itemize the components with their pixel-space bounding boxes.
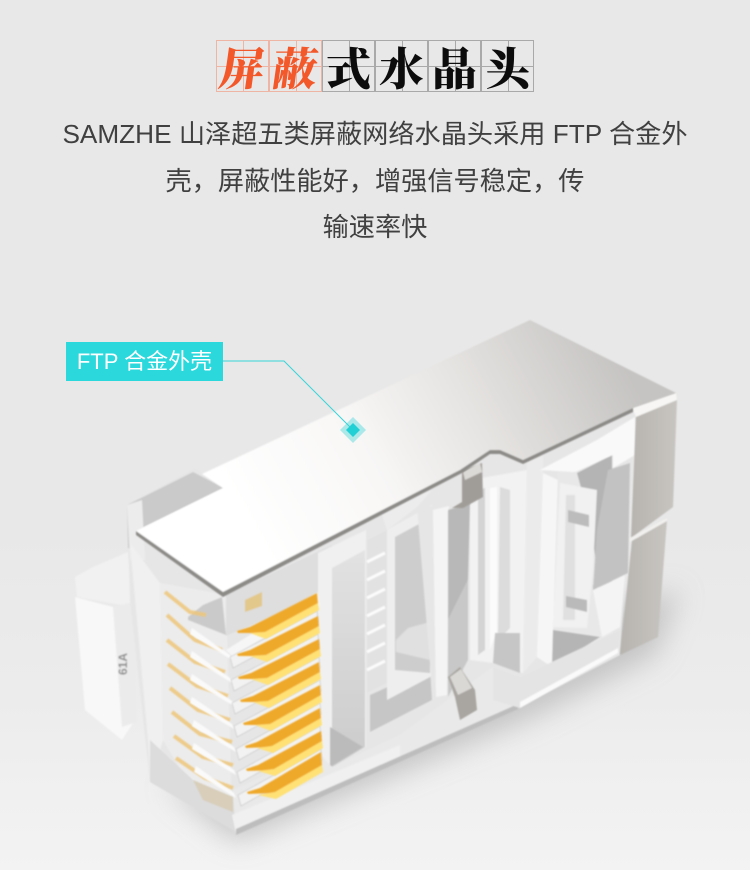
callout: FTP alloy shell: FTP 合金外壳 xyxy=(77,349,212,374)
metal clips and shell side panel xyxy=(448,393,677,720)
dark window xyxy=(448,503,470,620)
callout: FTP alloy shell xyxy=(66,342,366,443)
gold traces behind plastic xyxy=(165,592,233,788)
contact face xyxy=(160,583,232,815)
ground shadow xyxy=(165,590,680,842)
plastic contact blades xyxy=(190,592,322,806)
description text: 输速率快 xyxy=(323,212,427,242)
clear plastic body xyxy=(127,408,636,835)
wall above gold contacts xyxy=(226,545,332,636)
description text: SAMZHE 山泽超五类屏蔽网络水晶头采用 FTP 合金外 xyxy=(62,119,688,149)
connector tab at the left: 61A xyxy=(116,653,130,675)
lower front frame xyxy=(233,667,518,832)
gold contacts xyxy=(237,593,323,799)
right window xyxy=(552,445,612,667)
frame pillar xyxy=(318,530,366,772)
bright strip xyxy=(417,505,450,700)
description text: 壳，屏蔽性能好，增强信号稳定，传 xyxy=(166,166,584,196)
lower right corner of plastic xyxy=(493,630,620,708)
callout leader line xyxy=(223,361,353,430)
ladder strip xyxy=(367,530,387,693)
strip xyxy=(523,455,558,673)
window A xyxy=(387,505,432,700)
callout label xyxy=(66,342,223,381)
connector tab at the left xyxy=(75,552,137,740)
clear prism xyxy=(470,470,527,673)
rear plastic lip xyxy=(127,472,224,550)
left column xyxy=(130,543,163,783)
callout marker xyxy=(340,417,366,443)
title xyxy=(216,40,534,92)
metal top shell xyxy=(136,320,676,597)
bottom of left face xyxy=(150,740,236,832)
description text xyxy=(62,119,688,242)
